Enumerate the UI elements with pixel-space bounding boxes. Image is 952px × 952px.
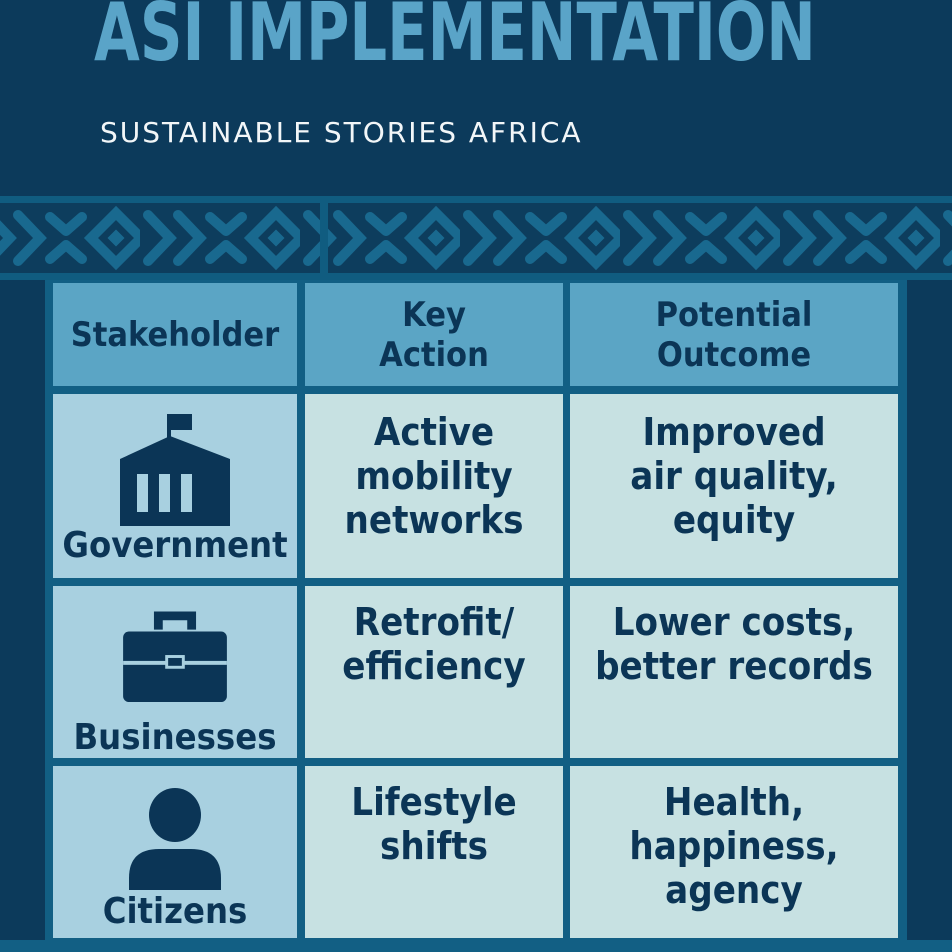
header: Stakeholder <box>53 283 297 386</box>
icon: briefcase <box>123 612 227 702</box>
icon: person <box>129 788 221 890</box>
header: Key Action: Key <box>402 294 466 334</box>
table frame <box>45 280 907 942</box>
row: Businesses <box>53 586 297 758</box>
header: Potential Outcome <box>570 283 898 386</box>
cell: Lower costs, better records <box>570 586 898 758</box>
header: Key Action: Action <box>379 334 489 374</box>
bottom strip <box>0 940 952 952</box>
cell: Retrofit/efficiency <box>305 586 563 758</box>
cell: Health, happiness, agency: Health, <box>664 780 804 824</box>
cell: Lower costs, better records: better records <box>595 644 873 688</box>
decorative pattern band <box>0 196 952 280</box>
cell: Lifestyle shifts <box>305 766 563 938</box>
icon: government building <box>120 414 230 526</box>
row: Citizens <box>53 766 297 938</box>
cell: Health, happiness, agency <box>570 766 898 938</box>
cell: Lifestyle shifts: shifts <box>380 824 488 868</box>
cell: Lower costs, better records: Lower costs, <box>613 600 855 644</box>
cell: Improved air quality, equity: Improved <box>642 410 826 454</box>
header: Potential Outcome: Outcome <box>657 334 811 374</box>
cell: Retrofit/efficiency: efficiency <box>342 644 526 688</box>
header: Potential Outcome: Potential <box>656 294 812 334</box>
header: Stakeholder: Stakeholder <box>71 314 279 354</box>
cell: Improved air quality, equity: air quality, <box>630 454 838 498</box>
header: Key Action <box>305 283 563 386</box>
cell: Retrofit/efficiency: Retrofit/ <box>354 600 514 644</box>
cell: Health, happiness, agency: happiness, <box>629 824 839 868</box>
cell: Lifestyle shifts: Lifestyle <box>351 780 517 824</box>
cell: Improved air quality, equity: equity <box>673 498 795 542</box>
cell: Active mobility networks: Active <box>374 410 494 454</box>
cell: Active mobility networks: networks <box>345 498 523 542</box>
subtitle: SUSTAINABLE STORIES AFRICA <box>100 116 583 149</box>
row: Government <box>53 394 297 578</box>
row: Government: Government <box>62 525 288 566</box>
row: Businesses: Businesses <box>74 717 276 758</box>
cell: Active mobility networks: mobility <box>355 454 513 498</box>
cell: Active mobility networks <box>305 394 563 578</box>
cell: Improved air quality, equity <box>570 394 898 578</box>
row: Citizens: Citizens <box>103 891 247 932</box>
cell: Health, happiness, agency: agency <box>665 868 803 912</box>
